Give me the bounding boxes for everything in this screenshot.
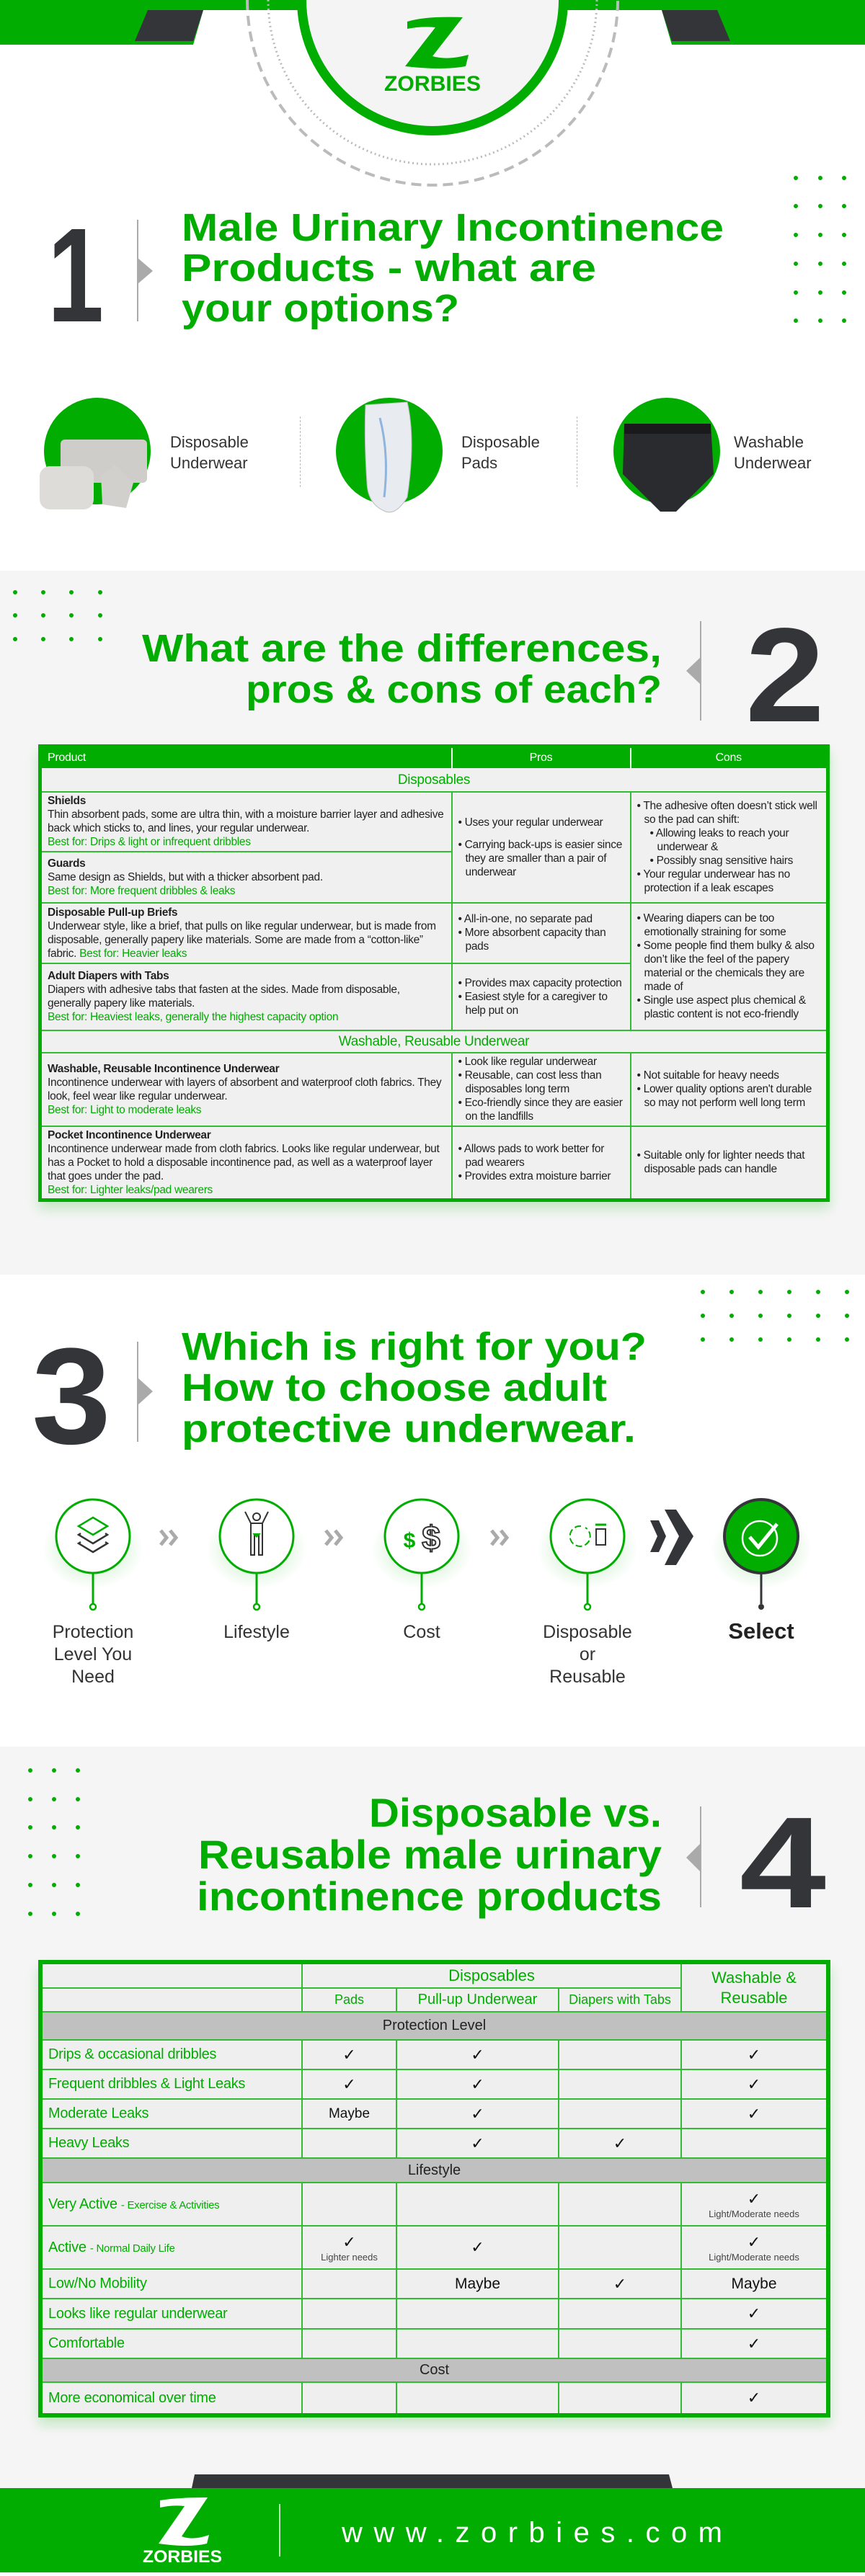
section 4 heading: incontinence products (197, 1873, 662, 1919)
table: pros and cons: Pros (530, 752, 552, 764)
table: comparison: Drips & occasional dribbles (48, 2046, 216, 2062)
product: disposable pads: Pads (461, 454, 497, 472)
table: pros and cons: Carrying back-ups is easier since they are smaller than a pair of underwear (465, 839, 622, 878)
table: comparison: ✓ (471, 2045, 484, 2064)
table: pros and cons: Lower quality options aren't durable so may not perform well long term (644, 1083, 812, 1109)
step 2 lifestyle (206, 1499, 307, 1610)
table: comparison: ✓ (748, 2304, 760, 2322)
table: pros and cons: Possibly snag sensitive hairs (657, 855, 793, 867)
table: comparison: ✓ (471, 2134, 484, 2152)
footer logo (143, 2497, 222, 2567)
table: pros and cons: Incontinence underwear made from cloth fabrics. Looks like regular underwear, but has a Pocket to hold a disposable incontinence pad, as well as a waterproof layer that goes under the pad. (48, 1143, 439, 1182)
table: pros and cons: Adult Diapers with Tabs (48, 970, 169, 982)
product: disposable pads (336, 398, 540, 513)
dots section 1 (794, 176, 846, 323)
table: pros and cons: Best for: Heaviest leaks, generally the highest capacity option (48, 1011, 338, 1023)
table: pros and cons: Your regular underwear has no protection if a leak escapes (643, 868, 790, 894)
product: disposable underwear: Disposable (170, 433, 249, 451)
product: washable underwear: Washable (734, 433, 804, 451)
steps diagram (49, 1498, 804, 1611)
text: Disposable (543, 1622, 632, 1642)
logo: ZORBIES (384, 72, 481, 96)
header with logo (0, 0, 865, 187)
table: pros and cons: All-in-one, no separate pad (464, 913, 593, 925)
arrow (161, 1530, 176, 1545)
table: pros and cons: Not suitable for heavy needs (644, 1069, 779, 1082)
table: pros and cons: Thin absorbent pads, some are ultra thin, with a moisture barrier layer and adhesive back which sticks to, and lines, your regular underwear. (48, 808, 443, 834)
product: disposable underwear: Underwear (170, 454, 248, 472)
table: pros and cons: Disposable Pull-up Briefs (48, 906, 177, 918)
table: pros and cons: Allows pads to work better for pad wearers (464, 1143, 604, 1169)
dots section 4 (28, 1768, 80, 1916)
table: comparison: Diapers with Tabs (569, 1992, 671, 2007)
section 2 heading: What are the differences, (142, 627, 662, 670)
table: comparison: ✓ (748, 2075, 760, 2093)
table: pros and cons: Washable, Reusable Underwear (339, 1033, 529, 1049)
section 2 background (0, 571, 865, 1275)
table: pros and cons: Disposables (398, 772, 470, 788)
table: comparison: Pull-up Underwear (418, 1992, 537, 2007)
table: pros and cons: Diapers with adhesive tabs that fasten at the sides. Made from disposable, generally papery like materials. (48, 984, 400, 1010)
table: comparison: Maybe (731, 2276, 777, 2291)
section 3 heading: protective underwear. (182, 1407, 636, 1450)
section 3 heading: Which is right for you? (182, 1325, 647, 1368)
arrow (492, 1530, 507, 1545)
arrow (326, 1530, 341, 1545)
table: comparison (38, 1960, 830, 2417)
table: pros and cons: Some people find them bulky & also don’t like the feel of the papery material or the chemicals they are made of (644, 940, 815, 993)
section 4 heading: Disposable vs. (369, 1790, 662, 1835)
table: pros and cons: Best for: Light to moderate leaks (48, 1104, 201, 1115)
table: pros and cons: The adhesive often doesn’t stick well so the pad can shift: (643, 800, 817, 826)
footer: www.zorbies.com (341, 2517, 722, 2549)
table: pros and cons: Guards (48, 857, 85, 869)
table: comparison: ✓ (471, 2238, 484, 2256)
table: comparison: ✓ (748, 2045, 760, 2064)
section 1 heading: Products - what are (182, 246, 596, 290)
table: pros and cons: Pocket Incontinence Underwear (48, 1128, 210, 1141)
section 1 heading: Male Urinary Incontinence (182, 206, 724, 249)
table: pros and cons: Same design as Shields, but with a thicker absorbent pad. (48, 870, 323, 883)
table: comparison: ✓ (613, 2134, 626, 2152)
section 4 background (0, 1747, 865, 2488)
table: comparison: ✓ (748, 2389, 760, 2407)
section 2 heading: pros & cons of each? (246, 668, 662, 711)
table: comparison: ✓ (342, 2232, 356, 2251)
table: pros and cons: Shields (48, 795, 86, 807)
table: pros and cons: Best for: Drips & light or infrequent dribbles (48, 836, 251, 848)
table: comparison: More economical over time (48, 2389, 216, 2405)
table: comparison: Lighter needs (321, 2251, 378, 2263)
table: comparison: Lifestyle (408, 2162, 461, 2178)
text: Select (728, 1618, 794, 1644)
footer logo: ZORBIES (143, 2547, 222, 2567)
table: pros and cons: Underwear style, like a brief, that pulls on like regular underwear, but is made from disposable, generally papery like materials. Some are made from a “cotton-like” fabric. Best for: Heavier leaks (48, 919, 436, 960)
step 3 cost: $ (422, 1519, 440, 1556)
table: pros and cons: Cons (716, 752, 742, 764)
text: or (580, 1644, 595, 1664)
table: pros and cons: Suitable only for lighter needs that disposable pads can handle (644, 1149, 804, 1175)
footer (0, 2474, 865, 2572)
table: pros and cons: Provides max capacity protection (465, 977, 621, 989)
logo (384, 17, 481, 96)
table: comparison: ✓ (748, 2104, 760, 2123)
table: comparison: ✓ (748, 2232, 760, 2251)
table: pros and cons: Uses your regular underwear (465, 816, 603, 829)
table: comparison: ✓ (471, 2104, 484, 2123)
step labels (53, 1622, 133, 1687)
table: pros and cons: Wearing diapers can be too emotionally straining for some (644, 912, 786, 938)
section 3 heading: How to choose adult (182, 1366, 607, 1409)
text: Cost (403, 1622, 440, 1642)
product: washable underwear (613, 398, 812, 512)
table: comparison: Cost (420, 2362, 449, 2378)
table: comparison: Comfortable (48, 2335, 125, 2351)
table: comparison: ✓ (748, 2335, 760, 2352)
table: comparison: Looks like regular underwear (48, 2306, 227, 2322)
table: comparison: Maybe (455, 2276, 500, 2291)
table: pros and cons: Incontinence underwear with layers of absorbent and waterproof cloth fabrics. They look, feel wear like regular underwear. (48, 1077, 441, 1102)
table: comparison: Maybe (329, 2105, 370, 2121)
table: pros and cons: Product (48, 752, 86, 764)
section 1 heading: your options? (182, 287, 459, 330)
step labels: Protection (53, 1622, 133, 1642)
section 1 heading (48, 202, 724, 331)
product: disposable underwear (40, 398, 249, 509)
product: disposable pads: Disposable (461, 433, 540, 451)
table: pros and cons: Provides extra moisture barrier (465, 1170, 611, 1182)
table: comparison: Washable & (711, 1969, 797, 1986)
table: pros and cons: Best for: More frequent dribbles & leaks (48, 885, 235, 896)
step 5 select (711, 1499, 812, 1610)
step 4 disposable or reusable (537, 1499, 638, 1610)
table: pros and cons: Single use aspect plus chemical & plastic content is not eco-friendly (644, 994, 806, 1020)
section 4 heading: Reusable male urinary (198, 1832, 662, 1877)
table: comparison: ✓ (471, 2075, 484, 2093)
text: Lifestyle (223, 1622, 290, 1642)
table: comparison: Disposables (448, 1966, 535, 1984)
section 4 heading (197, 1790, 826, 1922)
step 3 cost (371, 1499, 472, 1610)
table: comparison: Active - Normal Daily Life (48, 2239, 175, 2255)
table: pros and cons: Eco-friendly since they are easier on the landfills (465, 1097, 623, 1123)
table: comparison: ✓ (342, 2045, 356, 2064)
dots section 3 (701, 1290, 849, 1342)
step 1 protection (43, 1499, 143, 1610)
table: comparison: Reusable (721, 1989, 787, 2006)
step labels: Need (71, 1667, 115, 1687)
section 2 heading (142, 616, 825, 728)
table: pros and cons: Reusable, can cost less than disposables long term (465, 1069, 601, 1095)
table: pros and cons: Washable, Reusable Incontinence Underwear (48, 1062, 279, 1075)
table: comparison: Frequent dribbles & Light Leaks (48, 2076, 245, 2092)
table: comparison: ✓ (342, 2075, 356, 2093)
table: pros and cons: Look like regular underwear (465, 1056, 597, 1068)
big arrow (650, 1510, 693, 1565)
table: comparison: Heavy Leaks (48, 2135, 129, 2151)
table: pros and cons: Best for: Lighter leaks/pad wearers (48, 1183, 213, 1196)
table: comparison: Light/Moderate needs (709, 2208, 799, 2219)
text: Reusable (549, 1667, 626, 1687)
product: washable underwear: Underwear (734, 454, 812, 472)
step labels: Level You (54, 1644, 132, 1664)
table: comparison: ✓ (748, 2189, 760, 2208)
section 3 heading (32, 1320, 647, 1456)
table: comparison: Pads (334, 1992, 364, 2007)
dots section 2 (13, 590, 102, 641)
table: pros and cons: Easiest style for a caregiver to help put on (465, 990, 608, 1016)
table: pros and cons (38, 744, 830, 1202)
table: comparison: Very Active - Exercise & Activities (48, 2196, 219, 2212)
table: comparison: Light/Moderate needs (709, 2251, 799, 2263)
step 3 cost: $ (404, 1529, 416, 1553)
table: comparison: Low/No Mobility (48, 2276, 147, 2291)
table: comparison: ✓ (613, 2274, 626, 2293)
table: comparison: Moderate Leaks (48, 2105, 148, 2121)
table: pros and cons: Allowing leaks to reach your underwear & (656, 827, 789, 853)
table: pros and cons: More absorbent capacity than pads (465, 927, 606, 953)
table: comparison: Protection Level (383, 2018, 486, 2033)
